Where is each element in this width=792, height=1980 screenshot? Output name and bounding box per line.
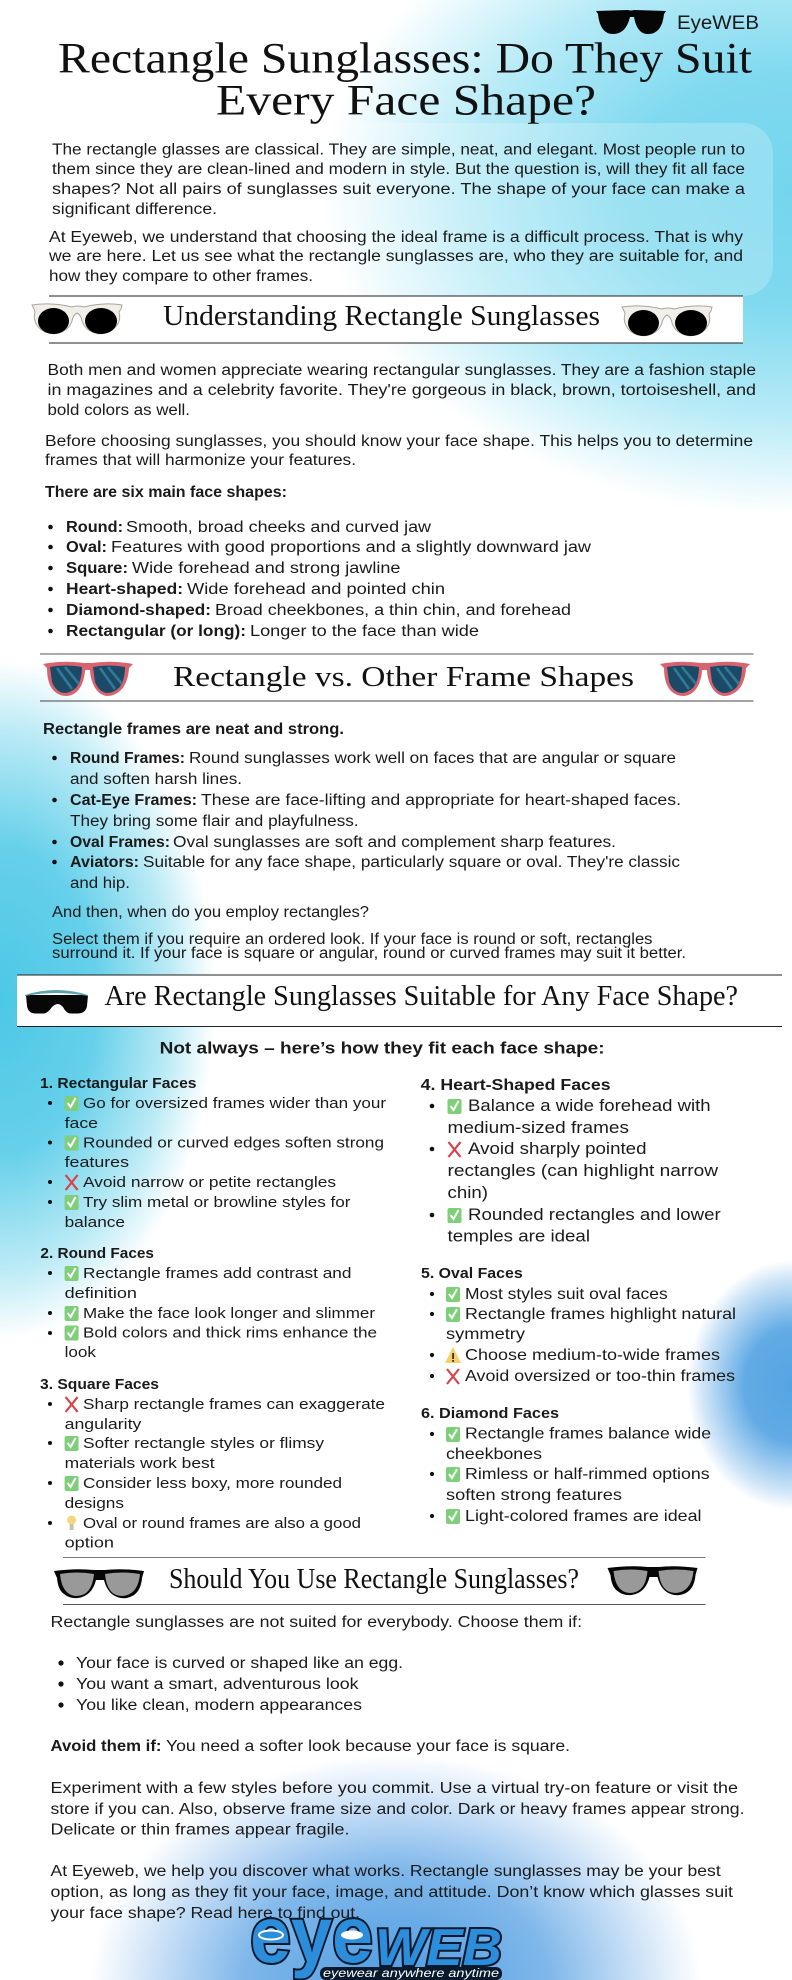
section: 3. Square Faces: Sharp rectangle frames can exaggerate — [83, 1396, 385, 1413]
list: face shapes: Wide forehead and pointed chin — [187, 581, 445, 598]
heading: Should You Use Rectangle Sunglasses?: Should You Use Rectangle Sunglasses? — [169, 1564, 579, 1595]
text: intro paragraph 2 — [48, 229, 743, 285]
heading: Should You Use Rectangle Sunglasses? — [54, 1557, 706, 1605]
column: right face shapes — [421, 1077, 736, 1525]
section: 4. Heart-Shaped Faces: temples are ideal — [448, 1226, 590, 1245]
text: six main face shapes lead-in: There are six main face shapes: — [45, 484, 287, 501]
section: 6. Diamond Faces: 6. Diamond Faces — [421, 1406, 559, 1422]
section: 6. Diamond Faces — [421, 1406, 711, 1525]
icon: black sunglasses — [596, 10, 666, 34]
list: reasons to choose: You want a smart, adventurous look — [76, 1676, 359, 1693]
section: 3. Square Faces: Consider less boxy, more rounded — [83, 1475, 342, 1492]
section: 1. Rectangular Faces: Try slim metal or browline styles for — [83, 1194, 350, 1211]
section: 1. Rectangular Faces — [40, 1076, 386, 1231]
list: frame comparisons: They bring some flair and playfulness. — [70, 813, 359, 830]
section: 2. Round Faces: look — [65, 1344, 97, 1361]
section: 3. Square Faces: 3. Square Faces — [40, 1377, 159, 1393]
text: avoid them if: You need a softer look because your face is square. — [166, 1738, 570, 1755]
panel: intro — [30, 123, 773, 296]
heading: Are Rectangle Sunglasses Suitable for Any Face Shape?: Are Rectangle Sunglasses Suitable for Any Face Shape? — [104, 981, 738, 1012]
list: reasons to choose: You like clean, modern appearances — [76, 1697, 362, 1714]
list: face shapes: Diamond-shaped: — [66, 602, 211, 619]
section: 5. Oval Faces: Avoid oversized or too-thin frames — [465, 1368, 735, 1385]
text: face shape advice: frames that will harmonize your features. — [45, 452, 356, 469]
list: frame comparisons: Oval Frames: — [70, 834, 170, 851]
section: 5. Oval Faces: 5. Oval Faces — [421, 1266, 523, 1282]
section: 6. Diamond Faces: Rectangle frames balance wide — [465, 1426, 711, 1443]
list: face shapes: Rectangular (or long): — [66, 623, 246, 640]
title: Every Face Shape? — [216, 77, 596, 124]
list: frame comparisons: Round Frames: — [70, 750, 185, 767]
list: frame comparisons: Cat-Eye Frames: — [70, 792, 197, 809]
section: 1. Rectangular Faces: features — [65, 1154, 129, 1171]
text: choose them if: Rectangle sunglasses are not suited for everybody. Choose them if: — [50, 1614, 582, 1631]
text: experiment paragraph: Delicate or thin frames appear fragile. — [50, 1822, 350, 1839]
text: when to employ rectangles: And then, when do you employ rectangles? — [52, 904, 369, 921]
brand mark: EyeWEB — [596, 10, 759, 34]
text: closing paragraph: At Eyeweb, we help you discover what works. Rectangle sunglasses may be your best — [50, 1863, 721, 1880]
list: frame comparisons: Round sunglasses work well on faces that are angular or square — [189, 750, 676, 767]
text: closing paragraph — [50, 1863, 734, 1922]
text: experiment paragraph: store if you can. Also, observe frame size and color. Dark or heavy frames appear strong. — [50, 1801, 744, 1818]
text: selection advice: surround it. If your face is square or angular, round or curved frames may suit it better. — [52, 945, 686, 962]
section: 1. Rectangular Faces: Avoid narrow or petite rectangles — [83, 1174, 336, 1191]
section: 3. Square Faces — [40, 1377, 385, 1552]
icon: pink sunglasses right — [660, 662, 750, 696]
text: intro paragraph 1: them since they are clean-lined and modern in style. But the question is, will they fit all face — [52, 161, 745, 178]
logo: eyeWEB: eye — [250, 1890, 373, 1979]
section: 3. Square Faces: angularity — [65, 1416, 142, 1433]
text: description paragraph: bold colors as well. — [48, 402, 190, 419]
section: 2. Round Faces: 2. Round Faces — [40, 1246, 154, 1262]
text: description paragraph — [48, 362, 756, 419]
text: description paragraph: Both men and women appreciate wearing rectangular sunglasses. They are a fashion staple — [48, 362, 756, 379]
section: 3. Square Faces: materials work best — [65, 1455, 216, 1472]
heading: Rectangle vs. Other Frame Shapes: Rectangle vs. Other Frame Shapes — [173, 662, 634, 693]
text: face shape advice — [45, 433, 753, 469]
text: selection advice: Select them if you require an ordered look. If your face is round or soft, rectangles — [52, 931, 653, 948]
section: 5. Oval Faces: symmetry — [446, 1326, 525, 1343]
icon: grey-lens sunglasses left — [54, 1569, 144, 1598]
text: experiment paragraph — [50, 1780, 744, 1839]
icon: black visor sunglasses — [25, 990, 88, 1014]
icon: grey-lens sunglasses right — [608, 1566, 698, 1595]
text: experiment paragraph: Experiment with a few styles before you commit. Use a virtual try-on feature or visit the — [50, 1780, 738, 1797]
list: frame comparisons: and soften harsh lines. — [70, 771, 242, 788]
text: avoid them if: Avoid them if: — [50, 1738, 162, 1755]
list: face shapes: Smooth, broad cheeks and curved jaw — [126, 519, 432, 536]
list: frame comparisons: Suitable for any face shape, particularly square or oval. They're classic — [143, 854, 680, 871]
list: frame comparisons: and hip. — [70, 875, 130, 892]
list: face shapes — [48, 519, 592, 640]
list: reasons to choose: Your face is curved or shaped like an egg. — [76, 1655, 403, 1672]
title — [58, 36, 752, 124]
list: face shapes: Square: — [66, 560, 128, 577]
list: reasons to choose — [58, 1655, 403, 1714]
icon: white round sunglasses right — [622, 306, 712, 336]
title: Rectangle Sunglasses: Do They Suit — [58, 36, 752, 83]
text: intro paragraph 1: shapes? Not all pairs of sunglasses suit everyone. The shape of your face can make a — [52, 181, 745, 198]
section: 6. Diamond Faces: cheekbones — [446, 1446, 542, 1463]
brand mark: EyeWEB: EyeWEB — [677, 13, 759, 34]
text: intro paragraph 2: how they compare to other frames. — [49, 268, 313, 285]
section: 6. Diamond Faces: Light-colored frames are ideal — [465, 1508, 702, 1525]
list: face shapes: Longer to the face than wide — [250, 623, 479, 640]
heading: Understanding Rectangle Sunglasses — [32, 296, 743, 344]
heading: Understanding Rectangle Sunglasses: Understanding Rectangle Sunglasses — [163, 301, 600, 332]
section: 4. Heart-Shaped Faces: rectangles (can highlight narrow — [448, 1161, 719, 1180]
section: 3. Square Faces: Softer rectangle styles or flimsy — [83, 1435, 325, 1452]
list: face shapes: Features with good proportions and a slightly downward jaw — [111, 539, 592, 556]
logo: eyeWEB: WEB — [375, 1919, 502, 1977]
list: frame comparisons: Oval sunglasses are soft and complement sharp features. — [173, 834, 616, 851]
icon: white round sunglasses left — [32, 304, 122, 334]
section: 5. Oval Faces: Rectangle frames highlight natural — [465, 1306, 736, 1323]
section: 4. Heart-Shaped Faces: Rounded rectangles and lower — [468, 1205, 721, 1224]
column: left face shapes — [40, 1076, 386, 1552]
list: face shapes: Oval: — [66, 539, 107, 556]
list: face shapes: Broad cheekbones, a thin chin, and forehead — [215, 602, 571, 619]
section: 1. Rectangular Faces: face — [65, 1115, 98, 1132]
text: intro paragraph 2: At Eyeweb, we understand that choosing the ideal frame is a difficult process. That is why — [49, 229, 743, 246]
text: intro paragraph 1 — [52, 141, 745, 218]
section: 4. Heart-Shaped Faces: Avoid sharply pointed — [468, 1139, 646, 1158]
logo: eyeWEB — [250, 1890, 502, 1980]
section: 2. Round Faces: Bold colors and thick rims enhance the — [83, 1324, 377, 1342]
logo: eyeWEB: eyewear anywhere anytime — [323, 1966, 499, 1980]
section: 6. Diamond Faces: soften strong features — [446, 1487, 622, 1504]
text: closing paragraph: your face shape? Read here to find out. — [50, 1905, 360, 1922]
list: frame comparisons: Aviators: — [70, 854, 139, 871]
list: face shapes: Round: — [66, 519, 123, 536]
list: frame comparisons — [52, 750, 681, 892]
section: 2. Round Faces: Rectangle frames add contrast and — [83, 1265, 352, 1282]
list: frame comparisons: These are face-lifting and appropriate for heart-shaped faces. — [201, 792, 681, 809]
text: face shape advice: Before choosing sunglasses, you should know your face shape. This helps you to determine — [45, 433, 753, 450]
section: 3. Square Faces: designs — [65, 1495, 124, 1512]
list: face shapes: Heart-shaped: — [66, 581, 183, 598]
text: closing paragraph: option, as long as they fit your face, image, and attitude. Don’t know which glasses suit — [50, 1884, 734, 1901]
section: 2. Round Faces: Make the face look longer and slimmer — [83, 1305, 375, 1322]
text: intro paragraph 1: significant difference. — [52, 201, 217, 218]
icon: pink sunglasses left — [43, 662, 133, 696]
section: 4. Heart-Shaped Faces: 4. Heart-Shaped Faces — [421, 1077, 611, 1094]
section: 1. Rectangular Faces: Rounded or curved edges soften strong — [83, 1134, 384, 1152]
section: 3. Square Faces: Oval or round frames are also a good — [83, 1515, 361, 1532]
list: face shapes: Wide forehead and strong jawline — [132, 560, 400, 577]
section: 1. Rectangular Faces: 1. Rectangular Faces — [40, 1076, 196, 1092]
section: 4. Heart-Shaped Faces: chin) — [448, 1183, 488, 1202]
text: avoid them if — [50, 1738, 570, 1755]
text: intro paragraph 1: The rectangle glasses are classical. They are simple, neat, and elegant. Most people run to — [52, 141, 745, 158]
section: 5. Oval Faces — [421, 1266, 736, 1385]
section: 3. Square Faces: option — [65, 1534, 114, 1552]
section: 4. Heart-Shaped Faces: Balance a wide forehead with — [468, 1096, 711, 1115]
section: 5. Oval Faces: Choose medium-to-wide frames — [465, 1347, 720, 1364]
section: 6. Diamond Faces: Rimless or half-rimmed options — [465, 1466, 710, 1483]
section: 2. Round Faces: definition — [65, 1285, 137, 1302]
text: rectangle frames lead-in: Rectangle frames are neat and strong. — [43, 721, 344, 738]
section: 2. Round Faces — [40, 1246, 377, 1361]
text: selection advice — [52, 931, 686, 962]
section: 4. Heart-Shaped Faces: medium-sized frames — [448, 1118, 629, 1137]
section: 1. Rectangular Faces: balance — [65, 1214, 125, 1231]
section: 4. Heart-Shaped Faces — [421, 1077, 721, 1245]
text: intro paragraph 2: we are here. Let us see what the rectangle sunglasses are, who they are suitable for, and — [48, 248, 743, 265]
heading: Are Rectangle Sunglasses Suitable for Any Face Shape? — [17, 974, 782, 1027]
section: 5. Oval Faces: Most styles suit oval faces — [465, 1286, 668, 1303]
heading: Rectangle vs. Other Frame Shapes — [40, 654, 754, 702]
subheading: Not always: Not always – here’s how they fit each face shape: — [160, 1039, 605, 1058]
text: description paragraph: in magazines and a celebrity favorite. They're gorgeous in black, brown, tortoiseshell, and — [48, 382, 756, 399]
section: 1. Rectangular Faces: Go for oversized frames wider than your — [83, 1095, 386, 1112]
